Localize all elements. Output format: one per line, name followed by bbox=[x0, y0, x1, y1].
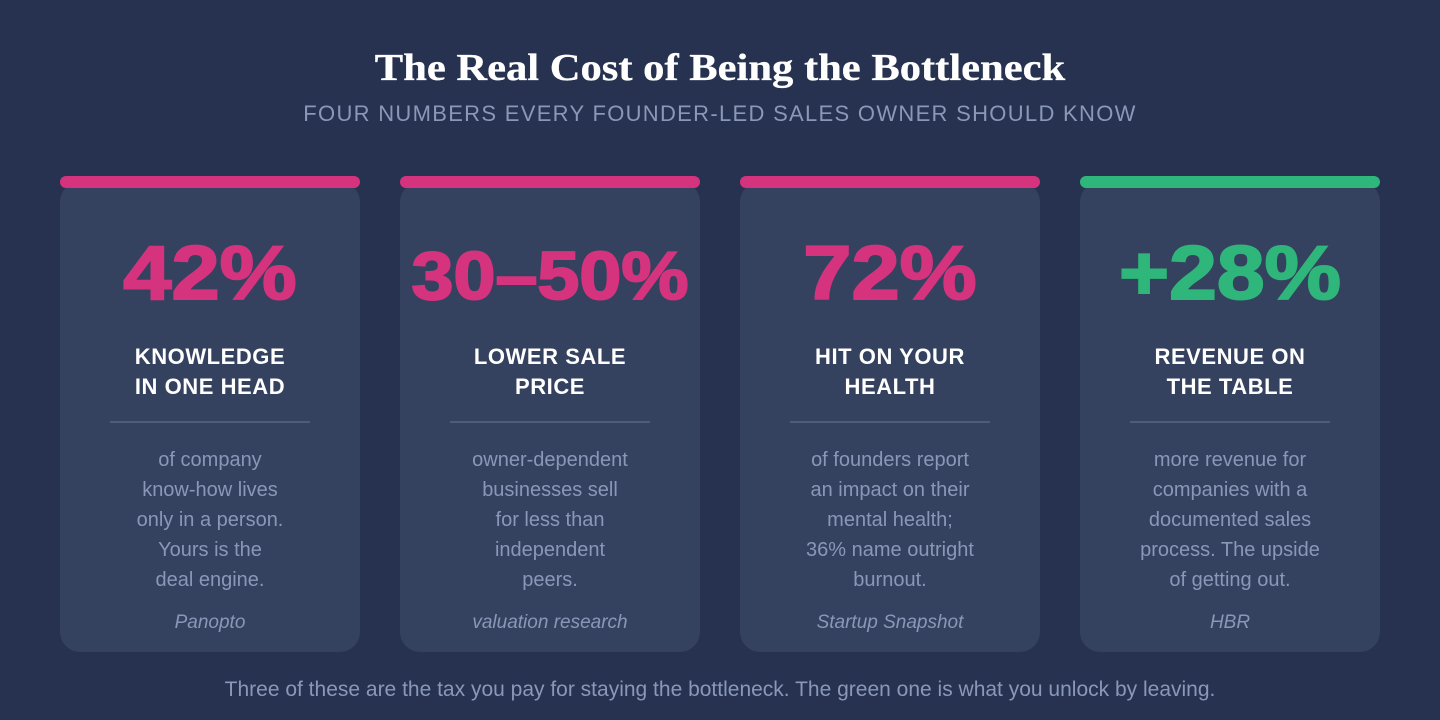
source: HBR bbox=[1210, 612, 1250, 633]
card description: of company bbox=[158, 449, 262, 471]
card label: REVENUE ON bbox=[1154, 344, 1305, 369]
card label: IN ONE HEAD bbox=[135, 374, 285, 399]
footer note: Three of these are the tax you pay for staying the bottleneck. The green one is what you unlock by leaving. bbox=[225, 678, 1215, 701]
card label bbox=[1154, 344, 1305, 399]
card description: peers. bbox=[522, 569, 578, 591]
big number: 72%: 72% bbox=[803, 231, 977, 316]
source: Panopto bbox=[175, 612, 245, 633]
card description: 36% name outright bbox=[806, 539, 974, 561]
card label bbox=[815, 344, 965, 399]
card label: THE TABLE bbox=[1167, 374, 1293, 399]
source: valuation research bbox=[472, 612, 628, 633]
card description bbox=[806, 449, 974, 591]
card description: process. The upside bbox=[1140, 539, 1320, 561]
title: The Real Cost of Being the Bottleneck bbox=[375, 47, 1065, 89]
big number: 30–50%: 30–50% bbox=[411, 238, 689, 314]
card label: HEALTH bbox=[845, 374, 935, 399]
card description: burnout. bbox=[853, 569, 927, 591]
card description bbox=[472, 449, 628, 591]
card description: of founders report bbox=[811, 449, 969, 471]
panel: lower sale price bbox=[400, 176, 700, 652]
card label: PRICE bbox=[515, 374, 585, 399]
card description: independent bbox=[495, 539, 605, 561]
big number: +28%: +28% bbox=[1119, 231, 1341, 316]
card description: deal engine. bbox=[156, 569, 264, 591]
big number: 42%: 42% bbox=[123, 231, 297, 316]
card description: of getting out. bbox=[1169, 569, 1291, 591]
card description: for less than bbox=[496, 509, 604, 531]
card description: owner-dependent bbox=[472, 449, 628, 471]
card label: HIT ON YOUR bbox=[815, 344, 965, 369]
card description: mental health; bbox=[827, 509, 953, 531]
card description: know-how lives bbox=[142, 479, 278, 501]
card description: companies with a bbox=[1153, 479, 1307, 501]
card description bbox=[1140, 449, 1320, 591]
card description: only in a person. bbox=[137, 509, 283, 531]
card description: an impact on their bbox=[810, 479, 969, 501]
panel: revenue on the table bbox=[1080, 176, 1380, 652]
card description: Yours is the bbox=[158, 539, 262, 561]
card description: documented sales bbox=[1149, 509, 1311, 531]
card label: LOWER SALE bbox=[474, 344, 626, 369]
card label bbox=[135, 344, 285, 399]
card description: businesses sell bbox=[482, 479, 618, 501]
panel: knowledge in one head bbox=[60, 176, 360, 652]
card label: KNOWLEDGE bbox=[135, 344, 285, 369]
source: Startup Snapshot bbox=[817, 612, 963, 633]
card description: more revenue for bbox=[1154, 449, 1306, 471]
card description bbox=[137, 449, 283, 591]
card label bbox=[474, 344, 626, 399]
panel: hit on your health bbox=[740, 176, 1040, 652]
subtitle: FOUR NUMBERS EVERY FOUNDER-LED SALES OWNER SHOULD KNOW bbox=[303, 101, 1137, 126]
